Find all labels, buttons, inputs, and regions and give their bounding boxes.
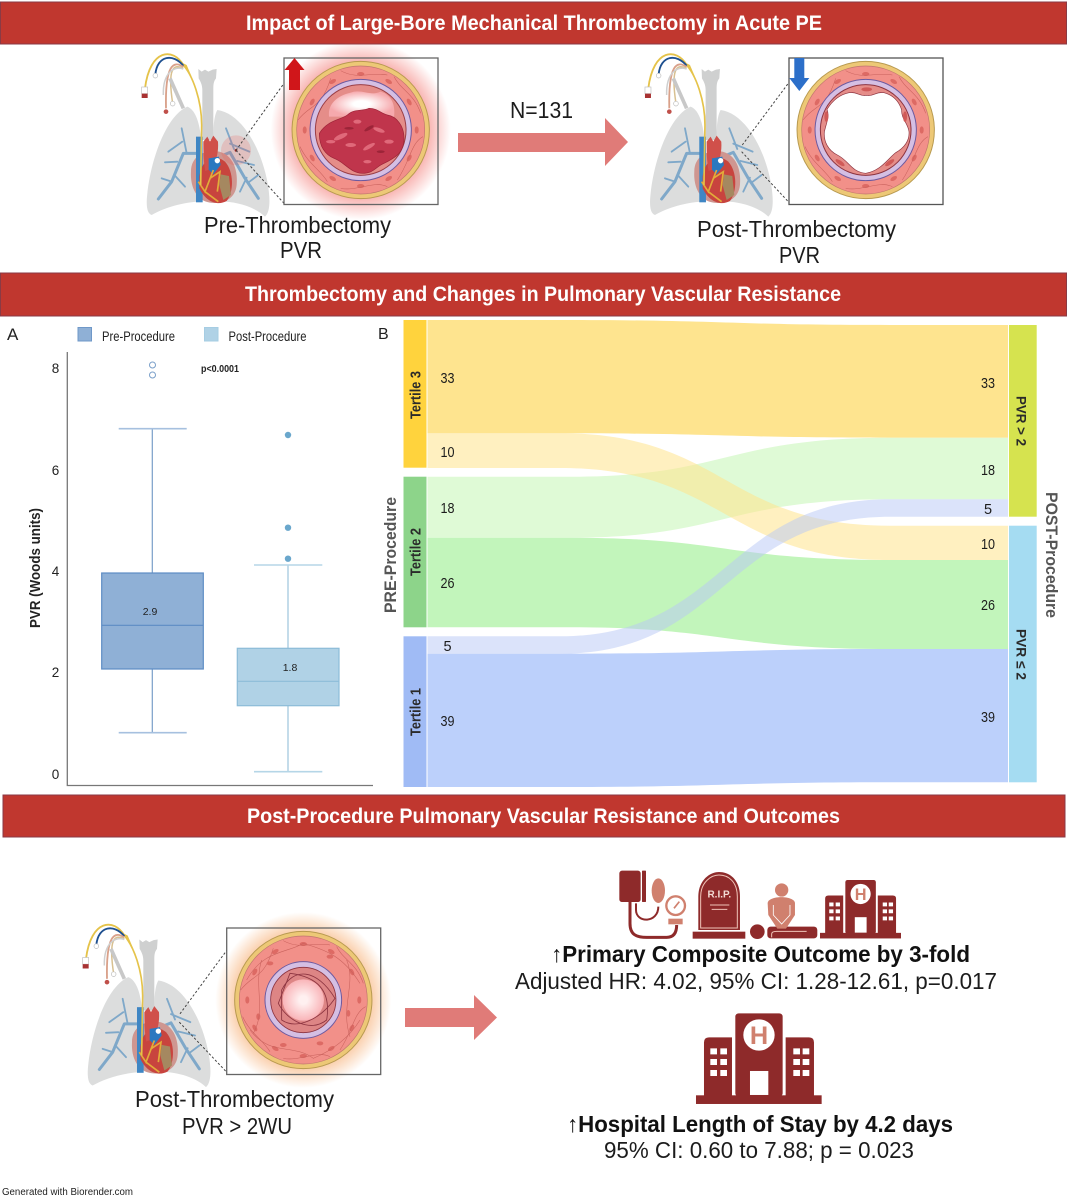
icon: lungs with catheter, post	[645, 54, 788, 217]
flow values, left: 39	[440, 714, 454, 730]
node: PVR ≤ 2	[1009, 526, 1037, 782]
panel: clotted vessel cross-section	[271, 40, 451, 220]
node: Tertile 1: Tertile 1	[408, 688, 424, 736]
flow values, right: 5	[984, 502, 992, 518]
y axis ticks	[52, 361, 60, 782]
icon: lungs with catheter	[83, 925, 227, 1087]
banner: Post-Procedure Pulmonary Vascular Resistance and Outcomes	[3, 795, 1065, 837]
label: Pre-Thrombectomy PVR	[204, 212, 391, 263]
flow values, right: 18	[981, 463, 995, 479]
icon: small hospital: H	[855, 886, 866, 904]
text: hospital length of stay: 95% CI: 0.60 to 7.88; p = 0.023	[604, 1137, 914, 1163]
illustration: post-thrombectomy with elevated PVR	[83, 912, 391, 1139]
p value: p<0.0001	[201, 363, 239, 375]
text: primary composite outcome: Adjusted HR: 4.02, 95% CI: 1.28-12.61, p=0.017	[515, 968, 997, 994]
flow values, right: 26	[981, 598, 995, 614]
label: Pre-Thrombectomy PVR: PVR	[280, 237, 322, 263]
node: PVR ≤ 2: PVR ≤ 2	[1014, 629, 1030, 680]
text: hospital length of stay: ↑Hospital Length of Stay by 4.2 days	[567, 1111, 953, 1137]
label: Post-Thrombectomy PVR > 2WU	[135, 1086, 334, 1139]
text: N=131: N=131	[510, 97, 573, 123]
banner: Post-Procedure Pulmonary Vascular Resistance and Outcomes: Post-Procedure Pulmonary Vascular Resistance and Outcomes	[247, 805, 840, 828]
flow values, left: 10	[440, 445, 454, 461]
label: Post-Thrombectomy PVR > 2WU: Post-Thrombectomy	[135, 1086, 334, 1112]
flow values, left: 33	[440, 371, 454, 387]
flow values, right: 10	[981, 537, 995, 553]
label: Post-Thrombectomy PVR: PVR	[779, 242, 820, 268]
flows	[428, 320, 1008, 787]
axis label: PRE-Procedure: PRE-Procedure	[381, 497, 400, 613]
credit: Generated with Biorender.com	[2, 1187, 133, 1198]
icon: blue down arrow	[789, 58, 809, 91]
box: post-procedure	[237, 432, 339, 772]
axes	[67, 352, 373, 786]
icon: large hospital	[696, 1013, 822, 1104]
y axis ticks: 6	[52, 463, 59, 478]
icon: large hospital: H	[750, 1022, 768, 1050]
flow values, left	[440, 371, 454, 730]
text: primary composite outcome	[515, 941, 997, 994]
banner: Impact of Large-Bore Mechanical Thrombectomy in Acute PE	[0, 2, 1066, 44]
legend: Post-Procedure	[228, 328, 307, 344]
label: Post-Thrombectomy PVR: Post-Thrombectomy	[697, 216, 896, 242]
icons: composite outcome	[619, 871, 901, 939]
chart A: PVR box plot	[7, 325, 373, 786]
flow values, right: 39	[981, 710, 995, 726]
flow values, left: 26	[440, 576, 454, 592]
panel letter B: B	[378, 326, 389, 343]
y axis ticks: 2	[52, 665, 59, 680]
icon: small hospital	[820, 880, 901, 938]
panel: open vessel cross-section	[789, 58, 943, 204]
y axis title: PVR (Woods units)	[27, 508, 44, 628]
label: Post-Thrombectomy PVR > 2WU: PVR > 2WU	[182, 1113, 292, 1139]
text: primary composite outcome: ↑Primary Composite Outcome by 3-fold	[551, 941, 970, 967]
node: PVR > 2	[1009, 325, 1037, 517]
label: Pre-Thrombectomy PVR: Pre-Thrombectomy	[204, 212, 391, 238]
icon: red up arrow	[284, 58, 304, 90]
icon: blood pressure cuff	[619, 871, 685, 937]
node: Tertile 3	[404, 320, 426, 468]
banner: Impact of Large-Bore Mechanical Thrombectomy in Acute PE: Impact of Large-Bore Mechanical Thrombectomy in Acute PE	[246, 12, 822, 35]
icon: CPR	[750, 883, 817, 939]
text: hospital length of stay	[567, 1111, 953, 1163]
axis label: POST-Procedure: POST-Procedure	[1042, 492, 1061, 618]
arrow: to outcomes	[405, 995, 497, 1040]
flow values, right: 33	[981, 376, 995, 392]
node: PVR > 2: PVR > 2	[1014, 396, 1030, 446]
node: Tertile 1	[404, 636, 426, 787]
illustration: pre-thrombectomy lungs and occluded vessel	[142, 40, 451, 263]
legend: Pre-Procedure	[102, 328, 175, 344]
box: pre-procedure	[102, 362, 203, 733]
box: pre-procedure: 2.9	[143, 606, 157, 618]
banner: Thrombectomy and Changes in Pulmonary Vascular Resistance: Thrombectomy and Changes in Pulmonary Vascular Resistance	[245, 283, 841, 306]
illustration: post-thrombectomy lungs and open vessel	[645, 54, 943, 268]
label: Post-Thrombectomy PVR	[697, 216, 896, 268]
node: Tertile 2: Tertile 2	[408, 528, 424, 576]
icon: gravestone: R.I.P.	[707, 890, 731, 901]
icon: lungs with catheter, pre	[142, 54, 284, 217]
chart B: Sankey of PVR tertiles	[378, 320, 1061, 787]
node: Tertile 2	[404, 477, 426, 627]
panel: narrowed vessel cross-section	[215, 912, 391, 1088]
y axis ticks: 4	[52, 564, 60, 579]
panel letter A: A	[7, 325, 19, 344]
icon: gravestone	[693, 872, 745, 939]
arrow: pre to post	[458, 118, 628, 166]
y axis ticks: 0	[52, 767, 59, 782]
y axis ticks: 8	[52, 361, 59, 376]
node: Tertile 3: Tertile 3	[408, 371, 424, 419]
flow values, left: 18	[440, 501, 454, 517]
banner: Thrombectomy and Changes in Pulmonary Vascular Resistance	[0, 273, 1066, 316]
box: post-procedure: 1.8	[283, 662, 297, 674]
flow values, left: 5	[443, 639, 452, 655]
legend	[78, 328, 307, 344]
flow values, right	[981, 376, 995, 726]
